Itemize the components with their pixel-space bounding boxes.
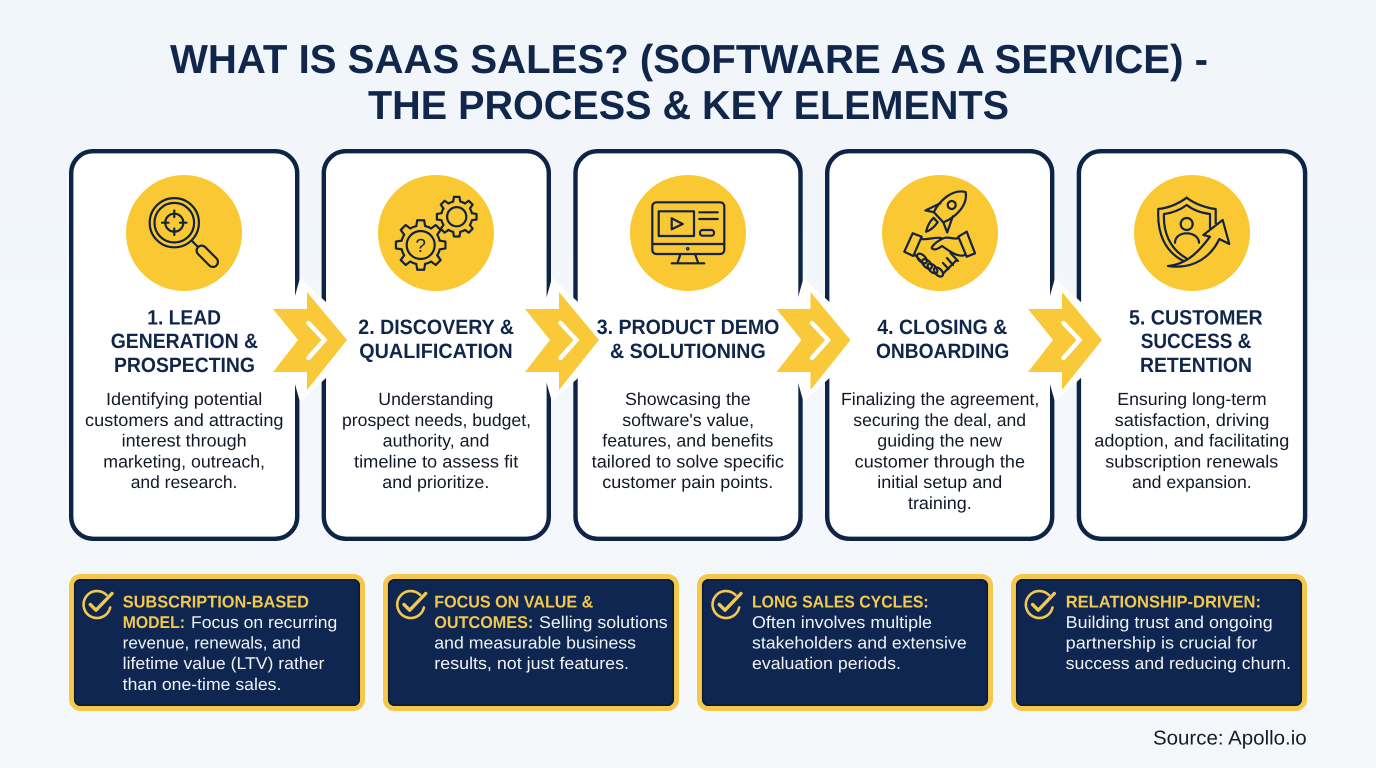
text: long sales cycles: evaluation periods. <box>752 654 901 673</box>
text: step 2 description: and prioritize. <box>382 472 489 492</box>
text: subscription-based model: SUBSCRIPTION-BASED <box>123 592 309 611</box>
heading: step 4 <box>876 316 1009 363</box>
panel: step 1 lead generation <box>71 151 297 539</box>
heading: step 1: 1. LEAD <box>147 306 221 329</box>
icon: check badge <box>84 591 112 618</box>
text: step 3 description: Showcasing the <box>625 389 751 409</box>
text: step 2 description: timeline to assess fit <box>354 451 518 471</box>
icon: monitor with video <box>630 175 746 291</box>
heading: step 2 <box>358 316 514 363</box>
text: step 4 description <box>841 389 1039 513</box>
panel: relationship-driven <box>1014 576 1304 708</box>
title <box>170 36 1208 128</box>
text: step 4 description: initial setup and <box>877 472 1002 492</box>
text: long sales cycles: Often involves multiple <box>752 613 932 632</box>
heading: step 5 <box>1129 306 1263 377</box>
text: relationship-driven <box>1066 592 1291 673</box>
panel: step 3 product demo <box>576 151 800 539</box>
icon: gears with question mark <box>378 175 494 291</box>
arrow: step 1 to 2 <box>273 278 350 402</box>
text: relationship-driven: RELATIONSHIP-DRIVEN: <box>1066 592 1261 611</box>
panel: step 2 discovery <box>324 151 549 539</box>
text: step 4 description: guiding the new <box>877 431 1002 451</box>
heading: step 1: GENERATION & <box>111 330 258 353</box>
text: long sales cycles <box>752 592 967 673</box>
panel: step 5 customer success <box>1079 151 1305 539</box>
text: step 5 description: subscription renewals <box>1105 451 1278 471</box>
text: step 5 description: adoption, and facilitating <box>1094 431 1289 451</box>
text: step 5 description: and expansion. <box>1132 472 1252 492</box>
text: subscription-based model: lifetime value (LTV) rather <box>123 654 325 673</box>
text: long sales cycles: stakeholders and extensive <box>752 634 967 652</box>
heading: step 3: & SOLUTIONING <box>610 340 766 363</box>
icon: check badge <box>397 591 426 618</box>
arrow: step 2 to 3 <box>525 278 602 402</box>
arrow: step 3 to 4 <box>776 278 854 402</box>
heading: step 5: SUCCESS & <box>1141 330 1251 353</box>
text: subscription-based model: Focus on recurring <box>191 613 337 632</box>
heading: step 5: RETENTION <box>1140 354 1252 377</box>
title: THE PROCESS & KEY ELEMENTS <box>368 82 1009 128</box>
text: long sales cycles: LONG SALES CYCLES: <box>752 592 929 611</box>
text: step 1 description: customers and attracting <box>85 410 284 430</box>
icon: rocket and handshake <box>882 175 998 291</box>
heading: step 4: ONBOARDING <box>876 340 1009 363</box>
text: relationship-driven: success and reducing churn. <box>1066 654 1291 673</box>
arrow: step 4 to 5 <box>1028 278 1105 402</box>
text: focus on value and outcomes <box>434 592 668 673</box>
source credit: Source: Apollo.io <box>1153 728 1307 750</box>
text: step 4 description: Finalizing the agreement, <box>841 389 1039 409</box>
heading: step 5: 5. CUSTOMER <box>1129 306 1263 329</box>
text: step 1 description: interest through <box>122 431 247 451</box>
text: step 1 description: Identifying potential <box>106 389 262 409</box>
icon: magnifying glass with target <box>126 175 242 291</box>
text: focus on value and outcomes: and measurable business <box>434 634 636 652</box>
text: step 4 description: training. <box>908 493 972 513</box>
text: subscription-based model: MODEL: <box>123 613 185 632</box>
text: step 5 description: satisfaction, driving <box>1115 410 1269 430</box>
text: focus on value and outcomes: OUTCOMES: <box>434 613 533 632</box>
title: WHAT IS SAAS SALES? (SOFTWARE AS A SERVICE) - <box>170 36 1208 82</box>
text: relationship-driven: Building trust and ongoing <box>1066 613 1273 632</box>
text: step 2 description: prospect needs, budget, <box>342 410 531 430</box>
icon: check badge <box>1026 591 1054 618</box>
heading: step 1 <box>111 306 258 377</box>
panel: subscription-based model <box>72 576 362 708</box>
text: step 4 description: securing the deal, and <box>853 410 1026 430</box>
heading: step 3 <box>597 316 779 363</box>
text: step 2 description: Understanding <box>378 389 493 409</box>
icon: check badge <box>713 591 741 618</box>
text: focus on value and outcomes: FOCUS ON VALUE & <box>434 592 593 611</box>
heading: step 2: 2. DISCOVERY & <box>358 316 514 339</box>
text: relationship-driven: partnership is crucial for <box>1066 634 1258 652</box>
text: step 5 description <box>1094 389 1289 492</box>
text: focus on value and outcomes: Selling solutions <box>539 613 668 632</box>
text: step 3 description: customer pain points. <box>602 472 773 492</box>
icon: gears with question mark: ? <box>415 236 426 257</box>
text: subscription-based model: revenue, renewals, and <box>123 634 301 652</box>
panel: focus on value and outcomes <box>386 576 676 708</box>
text: step 3 description: tailored to solve specific <box>592 451 784 471</box>
heading: step 3: 3. PRODUCT DEMO <box>597 316 779 339</box>
text: focus on value and outcomes: results, not just features. <box>434 654 629 673</box>
text: step 1 description <box>85 389 284 492</box>
icon: shield with person and arrow <box>1134 175 1250 291</box>
text: step 5 description: Ensuring long-term <box>1117 389 1267 409</box>
text: step 1 description: and research. <box>131 472 237 492</box>
text: subscription-based model: than one-time sales. <box>123 675 281 694</box>
text: step 3 description <box>592 389 784 492</box>
text: step 2 description <box>342 389 531 492</box>
text: step 3 description: features, and benefits <box>602 431 773 451</box>
heading: step 1: PROSPECTING <box>114 354 255 377</box>
panel: step 4 closing <box>827 151 1052 539</box>
text: step 2 description: authority, and <box>383 431 489 451</box>
text: step 3 description: software's value, <box>622 410 754 430</box>
heading: step 4: 4. CLOSING & <box>877 316 1007 339</box>
panel: long sales cycles <box>700 576 990 708</box>
heading: step 2: QUALIFICATION <box>359 340 513 363</box>
text: subscription-based model <box>123 592 337 694</box>
text: step 4 description: customer through the <box>855 451 1025 471</box>
text: step 1 description: marketing, outreach, <box>103 451 265 471</box>
